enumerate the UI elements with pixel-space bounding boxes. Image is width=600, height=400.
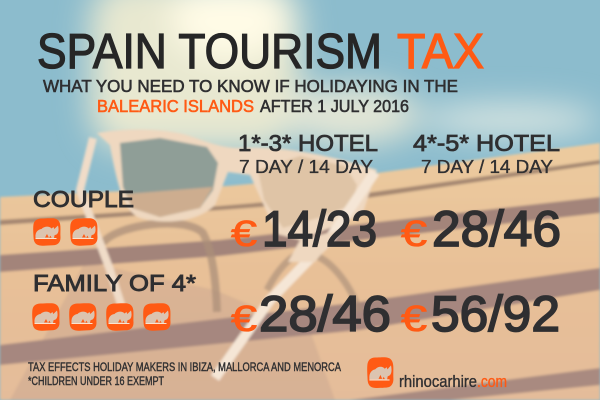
subtitle: BALEARIC ISLANDS	[97, 96, 254, 116]
price: family 1-3 star: €	[231, 298, 257, 339]
logo: rhinocarhire.com	[367, 357, 507, 391]
frame front	[97, 130, 377, 240]
icons: family rhinos	[32, 303, 171, 331]
footnote: *CHILDREN UNDER 16 EXEMPT	[28, 376, 164, 388]
footnote: TAX EFFECTS HOLIDAY MAKERS IN IBIZA, MALLORCA AND MENORCA	[28, 362, 341, 374]
icon: rhino logo	[367, 357, 393, 388]
column heading: 4-5 star hotel	[413, 130, 560, 177]
column heading: 1-3 star hotel: 1*-3* HOTEL	[238, 130, 378, 156]
price: couple 1-3 star: 14/23	[262, 201, 377, 257]
right lens	[258, 156, 357, 228]
subtitle: WHAT YOU NEED TO KNOW IF HOLIDAYING IN THE	[43, 76, 458, 96]
column heading: 4-5 star hotel: 4*-5* HOTEL	[413, 130, 560, 156]
price: couple 1-3 star: €	[231, 213, 257, 254]
column heading: 1-3 star hotel	[238, 130, 378, 177]
price: couple 4-5 star: 28/46	[432, 201, 561, 257]
icons: couple rhinos	[33, 218, 98, 246]
price: family 4-5 star: 56/92	[431, 286, 560, 342]
lens shadows	[103, 224, 217, 312]
column heading: 1-3 star hotel: 7 DAY / 14 DAY	[239, 157, 373, 177]
price: family 1-3 star: 28/46	[259, 286, 391, 342]
footnote	[28, 362, 341, 388]
column heading: 4-5 star hotel: 7 DAY / 14 DAY	[421, 157, 553, 177]
subtitle: AFTER 1 JULY 2016	[260, 96, 409, 116]
left lens	[120, 138, 218, 217]
price: couple 4-5 star: €	[401, 213, 427, 254]
logo: rhinocarhire.com: rhinocarhire	[399, 372, 477, 391]
row label: couple: COUPLE	[33, 186, 134, 212]
price: family 4-5 star: €	[401, 298, 427, 339]
logo: rhinocarhire.com: .com	[477, 372, 507, 391]
row label: family of 4: FAMILY OF 4*	[33, 270, 196, 296]
left arm	[80, 138, 127, 323]
title: TAX	[397, 24, 484, 79]
right arm	[215, 172, 375, 378]
subtitle	[43, 76, 458, 116]
title: SPAIN TOURISM	[37, 24, 382, 79]
